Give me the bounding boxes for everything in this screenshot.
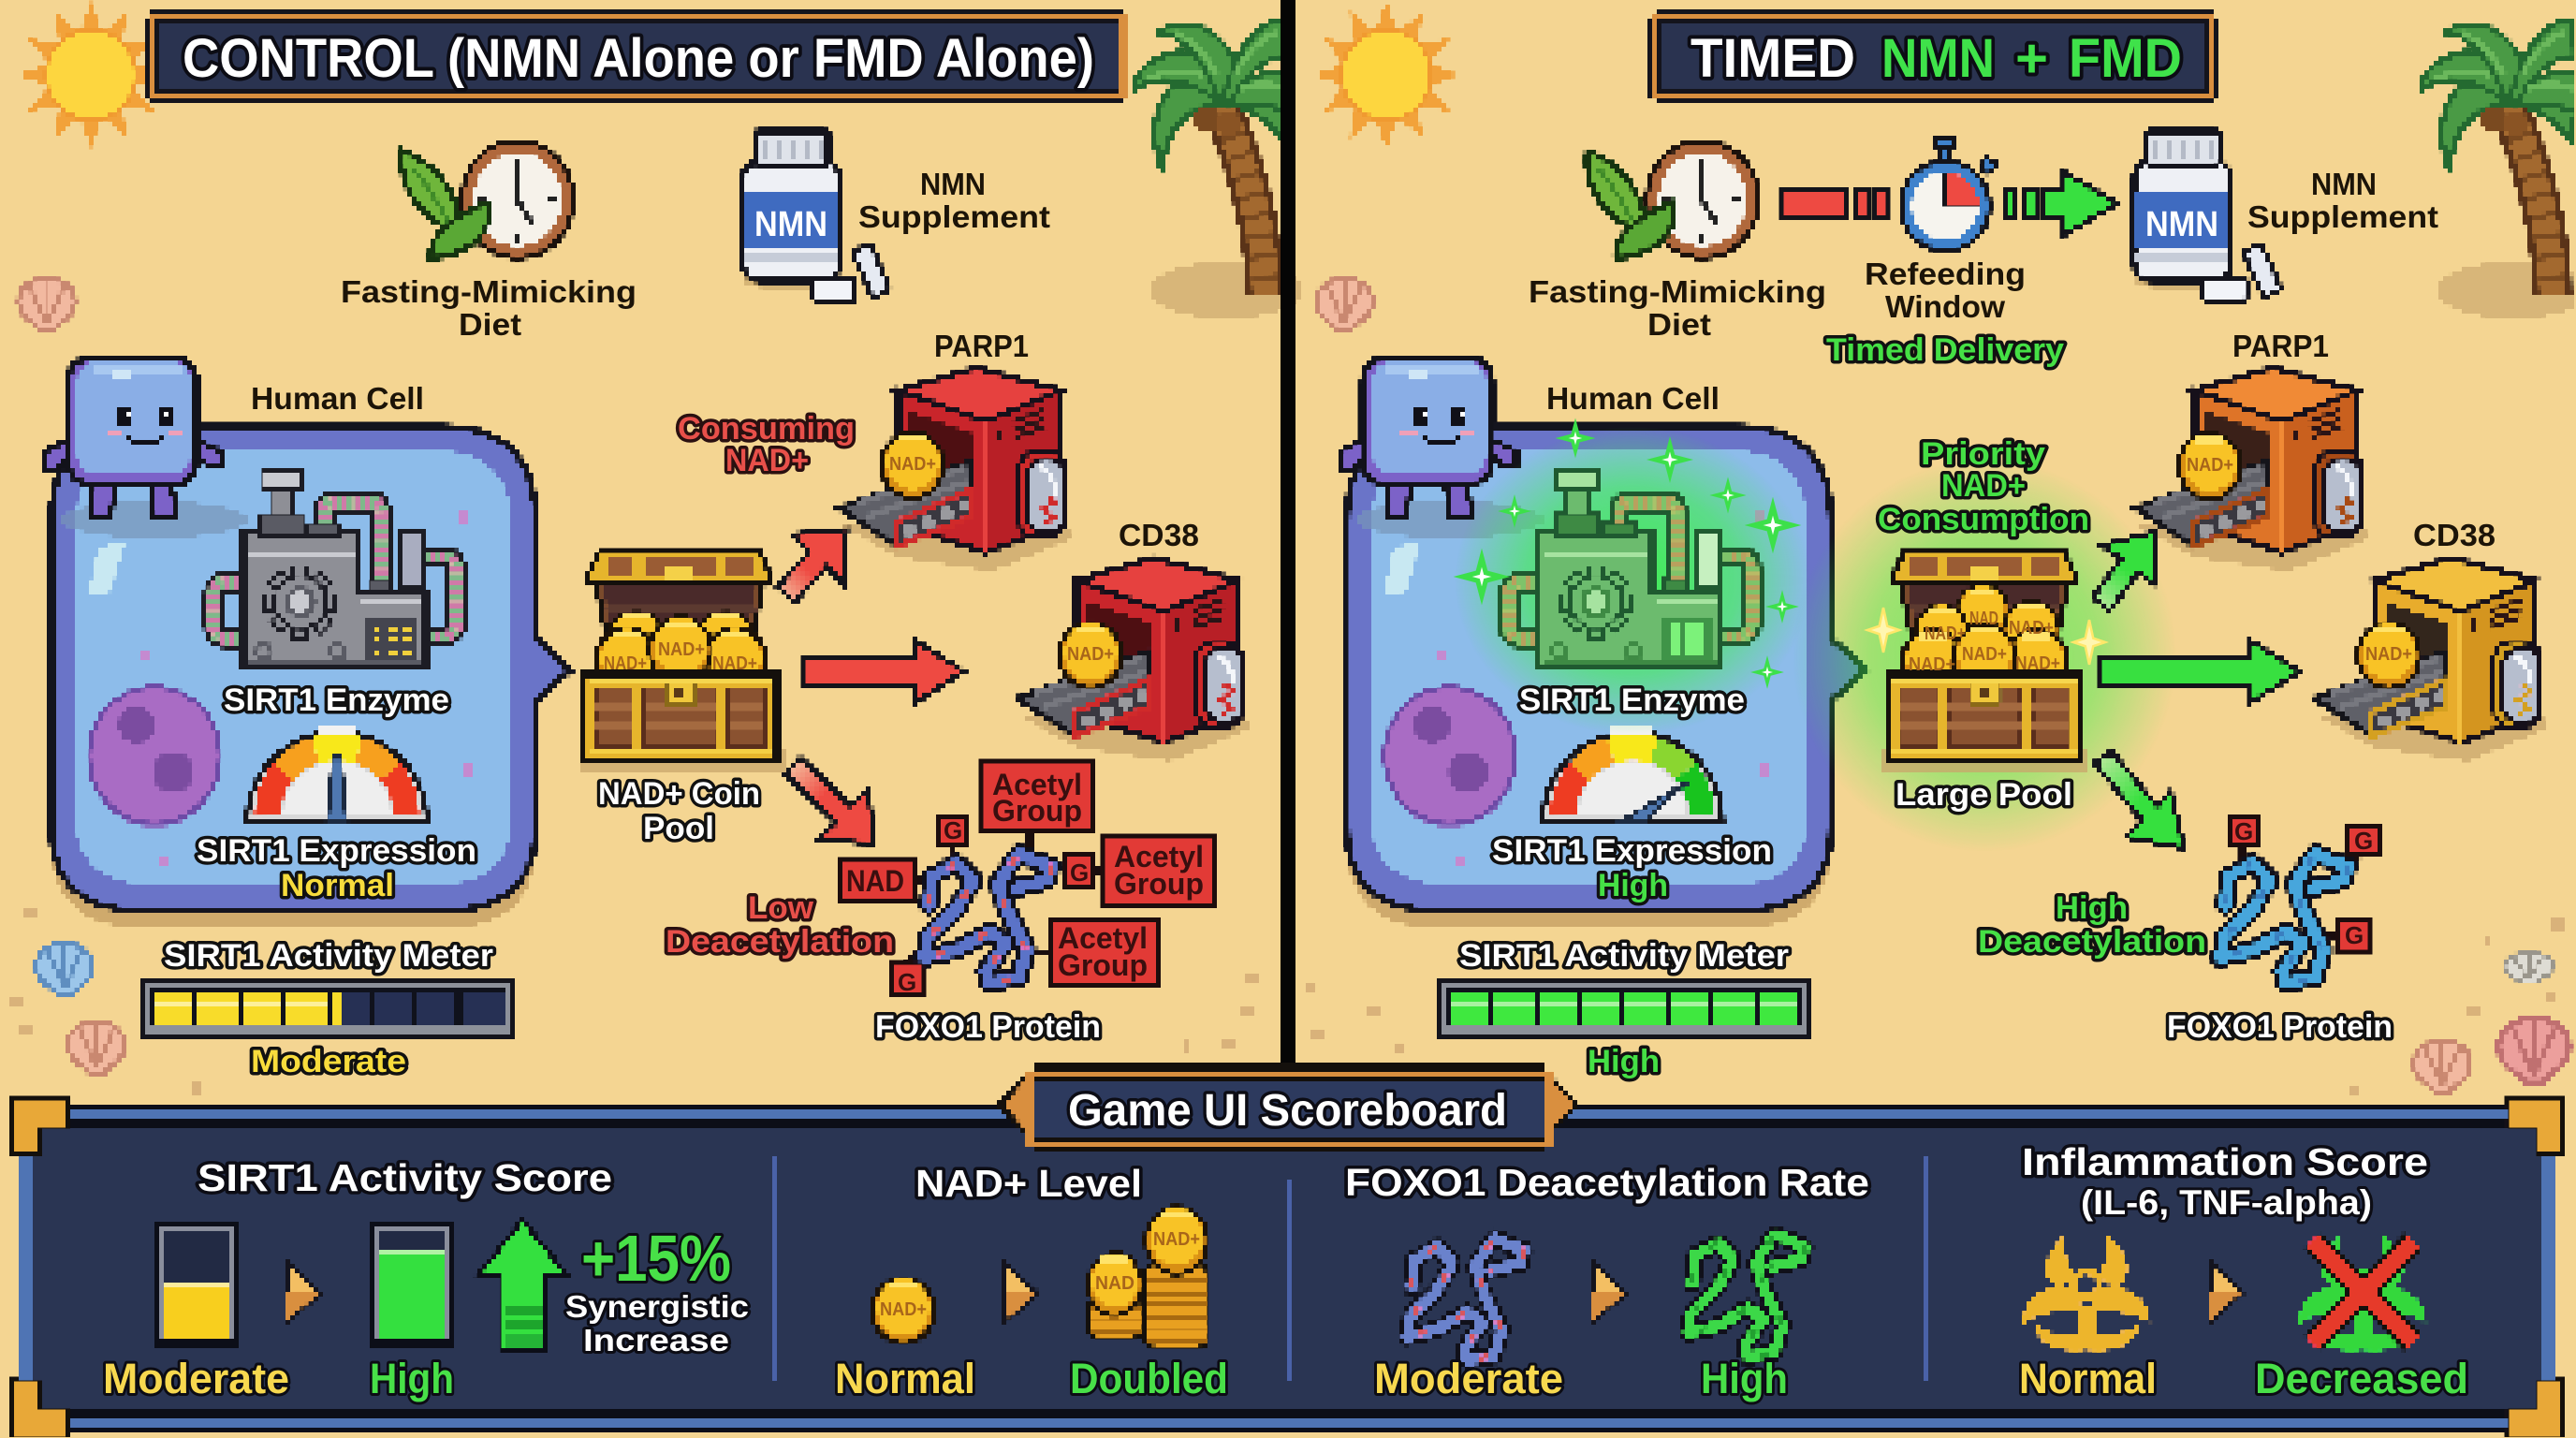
icon: seashell upper left [19,279,75,330]
label: SIRT1 enzyme: SIRT1 Enzyme [1519,682,1745,718]
label: PARP1: PARP1 [2232,329,2329,363]
callout: high deacetylation: High [2056,890,2128,926]
coin labels: NAD+ [2009,618,2054,638]
label: NMN supplement: Supplement [2247,199,2438,234]
arrow: to FOXO1 [2095,752,2184,848]
arrow: to CD38 [805,641,963,702]
label: SIRT1 activity meter: SIRT1 Activity Meter [164,938,493,974]
sparkles [1463,425,2105,683]
title: timed NMN + FMD: TIMED [1690,28,1855,89]
arrow: to CD38 [2101,641,2300,702]
gauge: SIRT1 expression high [1543,726,1722,822]
arrow: normal to decreased [2210,1262,2243,1323]
icon: normal NAD+ coin [872,1278,934,1343]
label: NAD+ coin pool: Pool [643,811,714,846]
nucleus [89,687,220,828]
label: fasting-mimicking diet: Fasting-Mimicking [341,274,637,309]
glow: treasure chest [1793,459,2176,852]
label: fasting-mimicking diet: Fasting-Mimicking [1529,274,1826,309]
icon: inflammation biohazard decreased with red X [2299,1234,2426,1351]
status: normal: Normal [281,868,394,903]
coin labels: NAD [1095,1273,1134,1294]
meter: SIRT1 activity high [1440,979,1809,1035]
meter: SIRT1 activity moderate [144,979,514,1035]
value: doubled: Doubled [1070,1355,1228,1402]
value: high: High [370,1355,454,1402]
acetyl group tags [846,768,1204,996]
coin labels [604,454,1114,674]
icon: seashell lower [68,1022,124,1073]
coin labels: NAD+ [2015,653,2060,674]
label: fasting-mimicking diet: Diet [459,307,521,342]
coin labels: NAD+ [1067,644,1114,665]
icon: seashell lower right [2499,1019,2569,1082]
G tags: G [2354,827,2373,855]
label: SIRT1 enzyme: SIRT1 Enzyme [224,682,449,718]
arrow: to PARP1 [778,529,847,602]
arrow: to PARP1 [2093,532,2157,610]
panel: game UI scoreboard [12,1064,2564,1437]
coin labels: NAD+ [1909,654,1955,675]
mascot: human cell character [45,358,221,518]
panel: control (NMN alone or FMD alone) [9,2,1303,1093]
callout: consuming NAD+: Consuming [678,411,855,447]
value: decreased: Decreased [2255,1355,2468,1402]
title: timed NMN + FMD: FMD [2069,28,2182,89]
label: human cell: Human Cell [1546,381,1720,416]
icon: seashell blue [37,944,93,994]
coin labels: NAD+ [658,639,705,660]
icon: seashell lower middle [2414,1041,2470,1092]
acetyl group tags: G [898,968,916,996]
label: refeeding window: Refeeding [1865,257,2026,291]
icon: moderate battery [154,1222,241,1346]
arrow: moderate to high [1593,1262,1626,1323]
status: high: High [1588,1044,1660,1079]
icon: coin on CD38 conveyor [1060,623,1121,688]
title banner frame [1649,10,2217,105]
arrow: red fasting segment [1783,190,1886,217]
icon: CD38 machine red [1017,558,1250,761]
icon: PARP1 machine red [840,368,1072,571]
status: moderate: Moderate [251,1044,406,1079]
heading: SIRT1 activity score: SIRT1 Activity Score [198,1156,612,1199]
G tags: G [2234,817,2253,845]
coin labels: NAD+ [889,454,936,475]
callout: consuming NAD+: NAD+ [725,443,809,478]
icon: NAD+ coin pool treasure chest [578,552,784,773]
acetyl group tags: NAD [846,864,904,898]
coin labels: NAD+ [2187,455,2233,476]
label: NMN supplement: NMN [920,167,986,201]
label: PARP1: PARP1 [934,329,1029,363]
icon: seashell upper left [1316,279,1372,330]
label: NMN supplement: Supplement [858,199,1050,234]
acetyl group tags: G [944,816,962,844]
G tags: G [2345,921,2364,949]
callout: priority NAD+ consumption: NAD+ [1941,468,2026,504]
sand specks [9,908,1260,1093]
acetyl group tags: Acetyl [1114,840,1204,873]
icon: fasting-mimicking diet leaf and clock [1587,139,1761,260]
label: NAD+ coin pool: NAD+ Coin [598,776,760,812]
icon: SIRT1 enzyme machine glowing [1509,472,1752,668]
scoreboard title: Game UI Scoreboard [1068,1086,1507,1136]
label: CD38: CD38 [1119,518,1199,552]
heading: inflammation score: Inflammation Score [2022,1140,2428,1183]
stat: plus 15 percent: +15% [581,1222,731,1295]
icon: green up arrow [478,1220,567,1351]
bottle label: NMN: NMN [2145,205,2218,244]
coin labels: NAD [1969,609,1998,629]
title: control: CONTROL (NMN Alone or FMD Alone) [183,28,1094,89]
status: high: High [1598,868,1668,903]
callout: priority NAD+ consumption: Consumption [1878,502,2089,537]
acetyl group tags: Group [1114,867,1204,901]
coin labels [880,1229,1200,1320]
coin labels: NAD+ [604,653,647,674]
callout: timed delivery: Timed Delivery [1826,332,2064,368]
coin labels: NAD+ [1925,624,1966,644]
label: FOXO1 protein: FOXO1 Protein [875,1009,1101,1045]
section dividers [770,1156,1930,1383]
callout: low deacetylation: Deacetylation [666,924,894,960]
title: timed NMN + FMD: NMN [1881,28,1995,89]
label: large pool: Large Pool [1895,777,2072,813]
label: SIRT1 expression: SIRT1 Expression [1492,833,1772,869]
callout: high deacetylation: Deacetylation [1978,924,2206,960]
value: high: High [1701,1355,1788,1402]
label: CD38: CD38 [2413,518,2496,552]
center divider [1281,0,1295,1105]
icon: palm tree [2422,21,2576,318]
acetyl group tags: Acetyl [992,768,1082,801]
arrow: normal to doubled [1004,1262,1037,1323]
icon: FOXO1 protein, acetylated [840,763,1214,996]
value: moderate: Moderate [1374,1355,1563,1402]
icon: pebble [2505,953,2552,983]
icon: SIRT1 enzyme machine [213,472,457,668]
icon: NMN supplement bottle [2134,131,2282,301]
arrow: to FOXO1 [785,757,873,844]
sand specks [1306,919,2563,1095]
icon: CD38 machine yellow [2315,558,2547,761]
coin labels: NAD+ [1153,1229,1200,1250]
nucleus [1384,687,1515,828]
value: moderate: Moderate [103,1355,289,1402]
label: FOXO1 protein: FOXO1 Protein [2167,1009,2393,1045]
arrow: moderate to high [287,1262,320,1323]
icon: NMN supplement bottle [743,131,891,301]
callout: priority NAD+ consumption: Priority [1921,436,2045,472]
G tags [2234,817,2373,949]
heading: FOXO1 deacetylation rate: FOXO1 Deacetylation Rate [1345,1161,1869,1204]
label: refeeding window: Window [1885,289,2005,324]
coin labels: NAD+ [1962,644,2007,665]
label: SIRT1 activity meter: SIRT1 Activity Meter [1459,938,1789,974]
icon: high battery [370,1222,454,1346]
icon: large NAD+ pool treasure chest [1883,552,2089,773]
coin labels [1909,455,2412,675]
mascot: human cell character [1340,358,1516,518]
icon: palm tree [1134,21,1303,318]
coin labels: NAD+ [712,653,757,674]
acetyl group tags: G [1070,858,1089,887]
label: NMN supplement: NMN [2311,167,2377,201]
acetyl group tags: Group [992,794,1082,828]
caption: synergistic increase: Increase [583,1323,729,1357]
label: human cell: Human Cell [251,381,424,416]
icon: sun [1313,2,1459,148]
human cell body [1347,427,1866,928]
coin labels: NAD+ [880,1299,927,1320]
icon: sun [18,2,164,148]
heading: NAD+ level: NAD+ Level [915,1162,1142,1205]
bottle label: NMN: NMN [754,205,827,244]
acetyl group tags: Acetyl [1058,921,1148,955]
label: SIRT1 expression: SIRT1 Expression [197,833,476,869]
subheading: IL-6, TNF-alpha: (IL-6, TNF-alpha) [2081,1183,2372,1222]
glow: enzyme machine [1455,426,1810,735]
caption: synergistic increase: Synergistic [565,1289,749,1324]
panel: timed NMN + FMD [1306,2,2576,1095]
label: fasting-mimicking diet: Diet [1647,307,1711,342]
title banner frame [144,10,1130,105]
icon: PARP1 machine orange [2136,368,2368,571]
coin labels: NAD+ [2365,644,2412,665]
callout: low deacetylation: Low [748,890,814,926]
icon: FOXO1 moderate [1407,1238,1524,1361]
gauge: SIRT1 expression normal [247,726,427,822]
scoreboard frame [12,1100,2564,1437]
icon: coin on PARP1 conveyor [882,433,944,498]
icon: refeeding window stopwatch [1898,137,1997,253]
arrow: green refeeding segment [2005,172,2117,235]
icon: coin on CD38 conveyor [2358,623,2420,688]
value: normal: Normal [835,1355,975,1402]
icon: fasting-mimicking diet leaf and clock [402,139,576,260]
scoreboard title tab frame [1000,1064,1576,1152]
acetyl group tags: Group [1058,948,1148,982]
icon: doubled coin stacks [1088,1207,1208,1348]
value: normal: Normal [2019,1355,2157,1402]
icon: FOXO1 protein, deacetylated [2220,816,2378,983]
human cell body [51,427,570,928]
icon: coin on PARP1 conveyor [2179,433,2241,499]
icon: FOXO1 high [1688,1234,1805,1357]
icon: inflammation biohazard normal [2023,1234,2150,1351]
title: timed NMN + FMD: + [2015,28,2048,89]
